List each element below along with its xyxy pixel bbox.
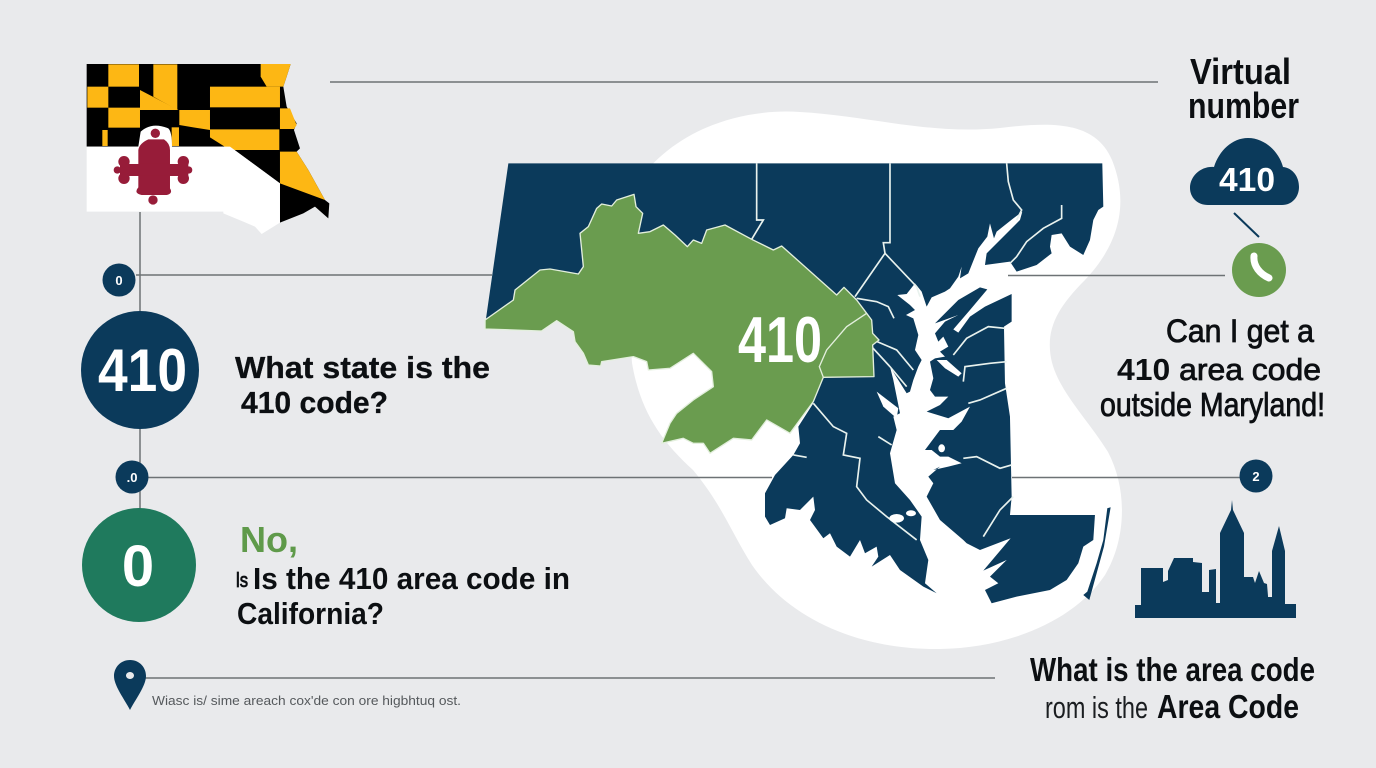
green 410 region xyxy=(485,194,879,453)
small marker right: 2 xyxy=(1252,469,1260,484)
question: area code: What is the area code xyxy=(1030,651,1315,688)
question: what state: 410 code? xyxy=(241,385,388,420)
footnote: Wiasc is/ sime areach cox'de con ore higbhtuq ost. xyxy=(152,693,461,708)
question: outside Maryland: outside Maryland! xyxy=(1100,386,1325,423)
flag red bottony cross xyxy=(114,129,192,205)
small marker middle: .0 xyxy=(127,470,137,485)
small marker top xyxy=(102,264,136,296)
flag black base xyxy=(87,64,329,223)
icon: city skyline xyxy=(1135,500,1296,618)
connector from cloud to phone xyxy=(1234,213,1259,237)
question: outside Maryland xyxy=(1100,313,1325,423)
barrier island xyxy=(1083,507,1111,600)
small marker middle xyxy=(116,460,148,494)
flag gold fields xyxy=(87,64,325,200)
heading: virtual number: number xyxy=(1188,85,1299,126)
Maryland map xyxy=(485,163,1111,603)
question: what state xyxy=(235,350,490,420)
green zero badge xyxy=(82,508,196,622)
eastern shore in navy xyxy=(925,287,1095,603)
map label 410: 410 xyxy=(738,303,822,376)
Maryland flag shaped map xyxy=(87,64,329,234)
question: California xyxy=(236,519,570,631)
410 badge xyxy=(81,311,199,429)
question: area code: rom is the xyxy=(1045,690,1148,725)
icon: cloud 410: 410 xyxy=(1219,161,1275,198)
question: California: Is the 410 area code in xyxy=(253,561,570,596)
county lines and rivers xyxy=(752,163,1062,540)
white blob behind map xyxy=(626,112,1122,649)
western and southern Maryland in navy xyxy=(486,163,1103,593)
heading: virtual number: Virtual xyxy=(1190,51,1291,92)
bay islands and inlets xyxy=(877,360,962,523)
green zero badge: 0 xyxy=(122,534,154,599)
410 badge: 410 xyxy=(98,337,187,404)
icon: phone circle xyxy=(1232,243,1286,297)
small marker top: 0 xyxy=(115,273,123,288)
question: California: California? xyxy=(237,596,384,631)
question: California: No, xyxy=(240,519,298,560)
question: California: ls xyxy=(236,570,248,592)
icon: cloud 410 xyxy=(1190,138,1299,205)
question: what state: What state is the xyxy=(235,350,490,385)
question: area code: Area Code xyxy=(1157,688,1299,725)
heading: virtual number xyxy=(1188,51,1299,126)
flag white lower field xyxy=(87,126,280,234)
question: outside Maryland: Can I get a xyxy=(1166,313,1314,349)
question: area code xyxy=(1030,651,1315,725)
small marker right xyxy=(1240,460,1272,492)
icon: location pin xyxy=(114,660,146,710)
question: outside Maryland: 410 area code xyxy=(1117,352,1321,387)
